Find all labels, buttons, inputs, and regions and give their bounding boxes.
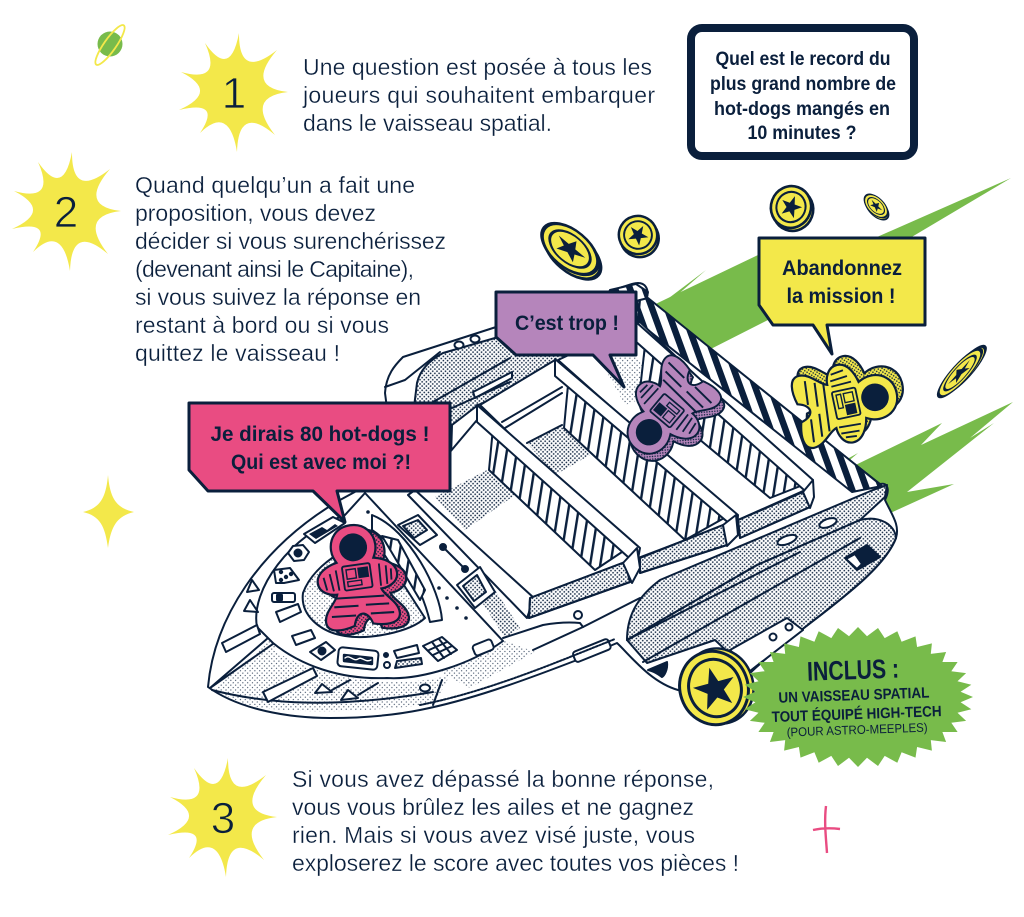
- step 1: text: [302, 54, 655, 136]
- step 1: number burst: [179, 33, 288, 152]
- dividing walls: [408, 322, 813, 618]
- meeple: purple crew: [604, 350, 732, 480]
- meeple: yellow leaving the ship: [787, 345, 912, 452]
- step 1: text: joueurs qui souhaitent embarquer: [302, 82, 655, 108]
- question card: plus grand nombre de: [710, 74, 896, 95]
- step 2: text: si vous suivez la réponse en: [135, 284, 421, 310]
- cargo bay floors: [412, 322, 812, 610]
- duct shadow: [478, 590, 520, 638]
- step 1: text: Une question est posée à tous les: [303, 54, 652, 80]
- step 3: number burst: 3: [211, 794, 235, 843]
- hull silhouette: [208, 283, 897, 718]
- step 3: number burst: [168, 758, 277, 877]
- step 3: text: rien. Mais si vous avez visé juste, vous: [292, 822, 695, 848]
- step 2: text: Quand quelqu’un a fait une: [135, 172, 415, 198]
- bubble: purple: C’est trop !: [515, 312, 619, 335]
- step 3: text: exploserez le score avec toutes vos pièces !: [292, 850, 739, 876]
- striped tail band: [638, 298, 882, 492]
- wall caps: [623, 480, 814, 583]
- rear hull with dots: [627, 519, 896, 673]
- coin edge-on: [933, 341, 991, 402]
- bubble: purple: [496, 292, 636, 387]
- bubble: pink captain: Qui est avec moi ?!: [231, 451, 411, 474]
- step 2: number burst: 2: [54, 188, 78, 237]
- mid hull lines: [420, 598, 640, 705]
- bubble: yellow: [759, 238, 925, 354]
- step 3: text: Si vous avez dépassé la bonne réponse,: [292, 766, 714, 792]
- cross walls: [529, 492, 810, 618]
- bubble: yellow: Abandonnez: [782, 257, 902, 280]
- badge: included: (POUR ASTRO-MEEPLES): [786, 721, 928, 740]
- coin large left: [532, 214, 611, 289]
- icon: pink cross sparkle: [813, 806, 840, 853]
- icon: yellow sparkle: [83, 475, 134, 548]
- nose and lower hull shading: [210, 613, 535, 711]
- question card: Quel est le record du: [716, 49, 890, 70]
- step 2: text: décider si vous surenchérissez: [135, 228, 446, 254]
- coin second: [611, 209, 667, 264]
- question card: 10 minutes ?: [748, 123, 856, 144]
- hatched wall faces: [489, 345, 808, 570]
- coin third: [764, 180, 820, 237]
- step 2: number burst: [12, 152, 121, 271]
- right fin: [627, 485, 887, 640]
- step 2: text: (devenant ainsi le Capitaine),: [135, 256, 414, 282]
- step 3: text: [292, 766, 739, 876]
- question card: [691, 28, 914, 156]
- cockpit floor: [303, 540, 425, 637]
- icon: green planet with ring: [91, 22, 129, 68]
- upper left wing: [385, 300, 640, 497]
- meeple: pink captain: [310, 519, 413, 638]
- badge: included: UN VAISSEAU SPATIAL: [778, 685, 930, 707]
- coins floating: [532, 180, 991, 402]
- bubble: pink captain: Je dirais 80 hot-dogs !: [210, 423, 430, 446]
- step 2: text: [135, 172, 446, 366]
- step 1: number burst: 1: [222, 69, 246, 118]
- step 2: text: restant à bord ou si vous: [135, 312, 389, 338]
- arch with hatching: [372, 515, 442, 622]
- console ring: [256, 493, 503, 678]
- bay ducts and dots: [366, 510, 495, 620]
- right hull panel: [730, 618, 803, 671]
- badge: included: INCLUS :: [807, 654, 900, 687]
- bubble: pink captain: [189, 403, 450, 522]
- step 2: text: quittez le vaisseau !: [135, 340, 340, 366]
- green speed streaks: [643, 178, 1013, 515]
- bubble: yellow: la mission !: [786, 285, 896, 308]
- tail tip stripes: [610, 284, 648, 312]
- spaceship: [208, 283, 897, 718]
- nose rails: [222, 580, 430, 702]
- badge: included: TOUT ÉQUIPÉ HIGH-TECH: [771, 703, 942, 726]
- question card: hot-dogs mangés en: [714, 99, 890, 120]
- wheel coin: [669, 639, 764, 734]
- console controls: [272, 517, 495, 670]
- right fin details: [572, 516, 880, 677]
- coin small: [860, 190, 893, 224]
- badge: included: [743, 627, 973, 767]
- step 2: text: proposition, vous devez: [135, 200, 376, 226]
- step 3: text: vous vous brûlez les ailes et ne gagnez: [292, 794, 694, 820]
- step 1: text: dans le vaisseau spatial.: [303, 110, 552, 136]
